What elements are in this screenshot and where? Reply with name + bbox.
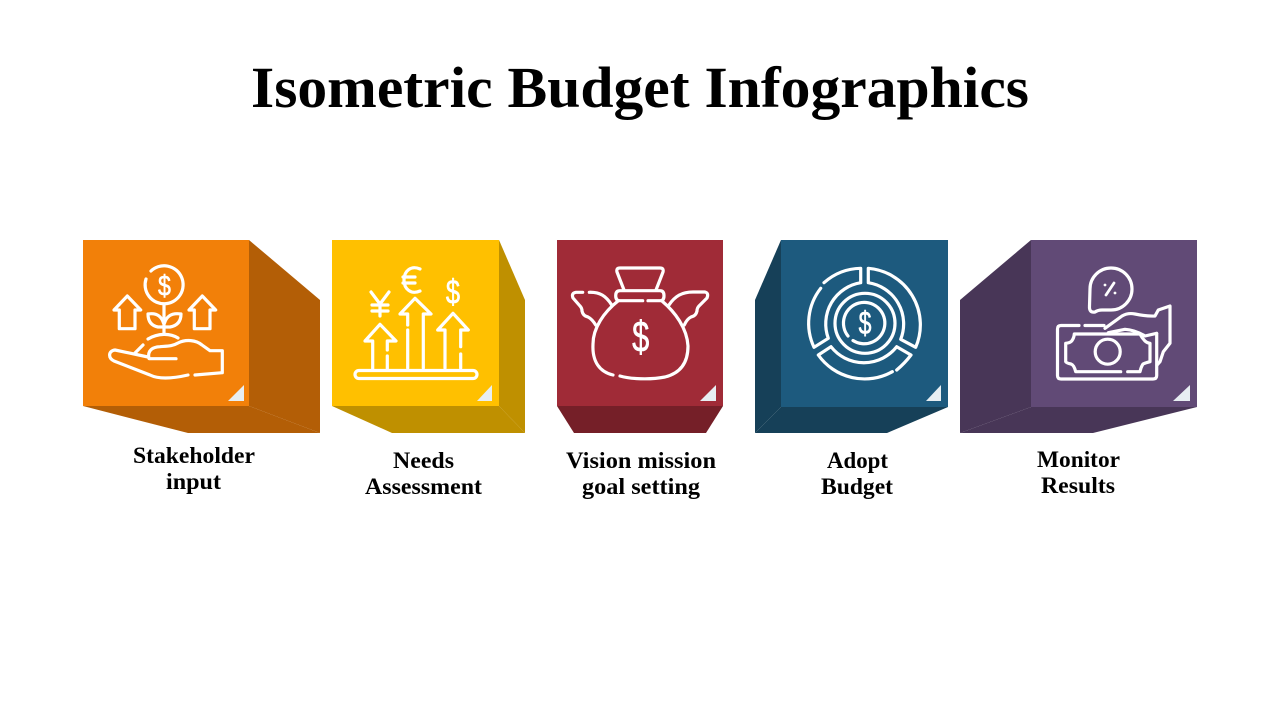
icon: plant and coin in hand xyxy=(110,266,222,378)
label: Vision mission xyxy=(566,448,716,473)
label: Results xyxy=(1041,473,1115,498)
label xyxy=(133,443,255,494)
panel: monitor results xyxy=(960,240,1197,498)
icon: circular target with dollar xyxy=(809,268,920,379)
folded corner xyxy=(700,385,716,401)
label xyxy=(1037,447,1120,498)
cube front xyxy=(1031,240,1197,407)
panel: needs assessment xyxy=(332,240,525,499)
icon: rising arrows with currencies xyxy=(355,268,477,378)
cube side xyxy=(960,240,1031,433)
folded corner xyxy=(228,385,244,401)
panel: stakeholder input xyxy=(83,240,320,494)
label: Assessment xyxy=(365,474,482,499)
cube side xyxy=(755,240,781,433)
cube front xyxy=(332,240,499,406)
icon: rising arrows with currencies: $ xyxy=(446,274,460,312)
label: Stakeholder xyxy=(133,443,255,468)
label: Adopt xyxy=(827,448,888,473)
icon: banknote in hand with percent bubble xyxy=(1058,268,1170,379)
label: goal setting xyxy=(582,474,701,499)
cube bottom xyxy=(557,406,723,433)
icon: money bag with wings: $ xyxy=(632,313,649,362)
cube front xyxy=(557,240,723,406)
cube bottom xyxy=(960,407,1197,433)
folded corner xyxy=(1173,385,1190,401)
label xyxy=(821,448,893,499)
cube front xyxy=(781,240,948,407)
label: Monitor xyxy=(1037,447,1120,472)
label: input xyxy=(166,469,221,494)
icon: circular target with dollar: $ xyxy=(859,305,872,341)
folded corner xyxy=(477,385,492,401)
title: Isometric Budget Infographics xyxy=(251,55,1029,120)
cube side xyxy=(499,240,525,433)
label xyxy=(566,448,716,499)
label: Needs xyxy=(393,448,454,473)
cube bottom xyxy=(755,407,948,433)
icon: money bag with wings xyxy=(572,268,708,379)
icon: plant and coin in hand: $ xyxy=(158,269,171,302)
cube bottom xyxy=(83,406,320,433)
folded corner xyxy=(926,385,941,401)
cube bottom xyxy=(332,406,525,433)
cube front xyxy=(83,240,249,406)
panel: adopt budget xyxy=(755,240,948,499)
cube side xyxy=(249,240,320,433)
panel: vision mission goal setting xyxy=(557,240,723,499)
label: Budget xyxy=(821,474,893,499)
label xyxy=(365,448,482,499)
